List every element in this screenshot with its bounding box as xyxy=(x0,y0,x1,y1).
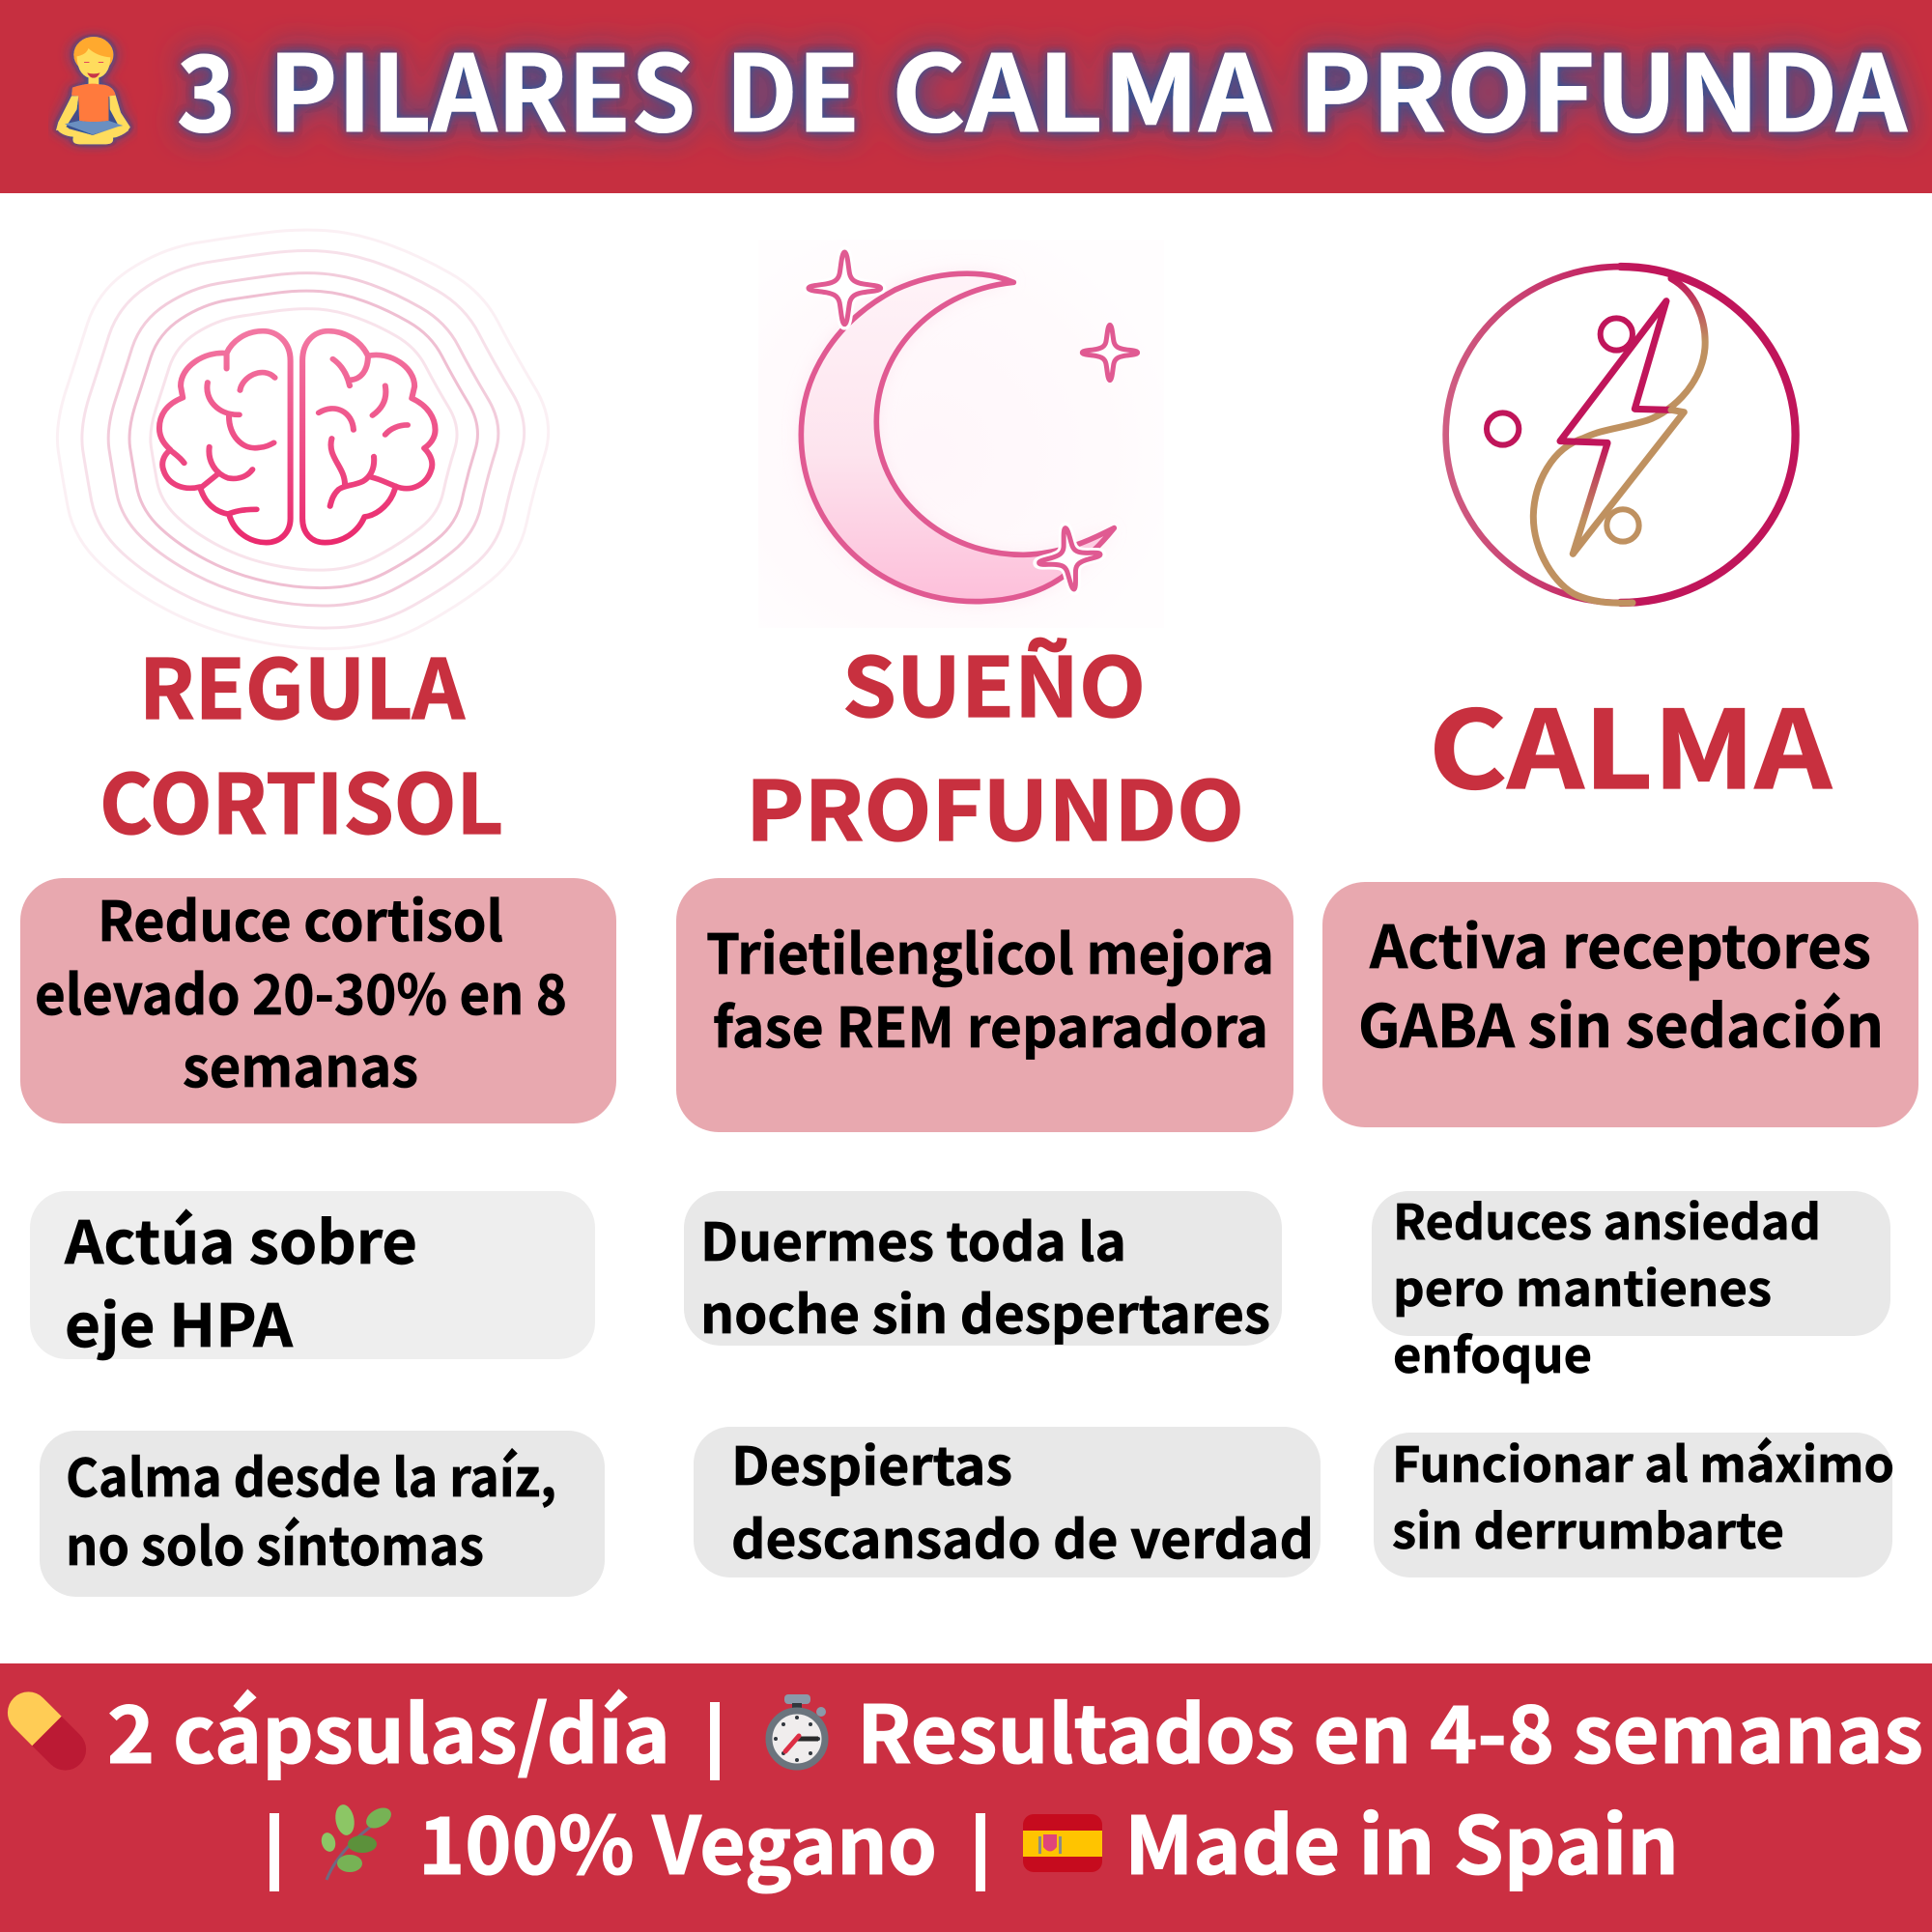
title: PILARES xyxy=(269,11,696,162)
card: despiertas descansado xyxy=(694,1424,1321,1577)
card: funcionar al maximo xyxy=(1374,1427,1894,1577)
icon: stopwatch xyxy=(769,1694,826,1767)
card: duermes toda la noche: noche sin despertares xyxy=(700,1272,1270,1349)
callout: activa receptores xyxy=(1322,882,1918,1127)
icon: flag of Spain xyxy=(1023,1814,1102,1872)
callout: reduce cortisol: Reduce cortisol xyxy=(98,878,503,957)
footer text: resultados: Resultados en 4-8 semanas xyxy=(857,1671,1923,1786)
icon: meditating person xyxy=(56,37,130,144)
icon: crescent moon with stars xyxy=(758,240,1164,628)
icon: pill xyxy=(0,1684,95,1778)
callout: reduce cortisol: elevado 20-30% en 8 xyxy=(35,952,567,1031)
card: reduces ansiedad: enfoque xyxy=(1393,1318,1592,1387)
heading: sueno profundo: PROFUNDO xyxy=(746,746,1244,865)
card: duermes toda la noche xyxy=(684,1191,1282,1349)
separator xyxy=(270,1813,279,1891)
footer text: capsulas: 2 cápsulas/día xyxy=(107,1671,670,1786)
icon: yin-yang lightning circle xyxy=(1446,267,1796,603)
header banner xyxy=(0,0,1932,193)
separator xyxy=(976,1813,985,1891)
callout: activa receptores: Activa receptores xyxy=(1369,899,1871,985)
title xyxy=(177,11,1908,162)
footer text: made in spain: Made in Spain xyxy=(1124,1782,1679,1897)
heading: calma: CALMA xyxy=(1429,664,1833,819)
card: despiertas descansado: Despiertas xyxy=(731,1424,1012,1500)
card: calma desde la raiz: Calma desde la raíz, xyxy=(66,1435,556,1512)
card: funcionar al maximo: sin derrumbarte xyxy=(1392,1493,1784,1563)
callout: reduce cortisol: semanas xyxy=(183,1024,418,1103)
card: funcionar al maximo: Funcionar al máximo xyxy=(1392,1427,1894,1496)
panel: sueno profundo xyxy=(676,240,1321,1577)
card: eje HPA: Actúa sobre xyxy=(64,1195,417,1281)
callout: trietilenglicol xyxy=(676,878,1293,1132)
title: PROFUNDA xyxy=(1298,11,1908,162)
footer text: vegano: 100% Vegano xyxy=(418,1782,937,1897)
title: 3 xyxy=(177,11,236,162)
icon: brain with ripple rings xyxy=(57,230,549,649)
card: eje HPA: eje HPA xyxy=(65,1278,294,1364)
heading: regula cortisol xyxy=(99,624,503,858)
panel: calma xyxy=(1322,267,1918,1577)
card: duermes toda la noche: Duermes toda la xyxy=(700,1200,1126,1276)
card: reduces ansiedad xyxy=(1372,1184,1890,1387)
callout: trietilenglicol: fase REM reparadora xyxy=(713,984,1268,1064)
icon: leaf sprig xyxy=(320,1804,395,1880)
title: DE xyxy=(725,11,860,162)
heading: regula cortisol: REGULA xyxy=(139,624,466,743)
card: eje HPA xyxy=(30,1191,595,1364)
callout: trietilenglicol: Trietilenglicol mejora xyxy=(706,911,1274,990)
callout: activa receptores: GABA sin sedación xyxy=(1358,979,1884,1065)
footer banner xyxy=(0,1663,1932,1932)
separator xyxy=(710,1702,720,1780)
heading: regula cortisol: CORTISOL xyxy=(99,739,503,858)
card: reduces ansiedad: pero mantienes xyxy=(1393,1251,1772,1321)
heading: sueno profundo: SUEÑO xyxy=(842,622,1146,741)
heading: sueno profundo xyxy=(746,622,1244,865)
panel: regula cortisol xyxy=(20,230,616,1597)
card: calma desde la raiz: no solo síntomas xyxy=(66,1504,484,1580)
card: reduces ansiedad: Reduces ansiedad xyxy=(1393,1184,1821,1254)
card: despiertas descansado: descansado de verdad xyxy=(731,1497,1314,1574)
card: calma desde la raiz xyxy=(40,1431,605,1597)
callout: reduce cortisol xyxy=(20,878,616,1123)
title: CALMA xyxy=(892,11,1272,162)
